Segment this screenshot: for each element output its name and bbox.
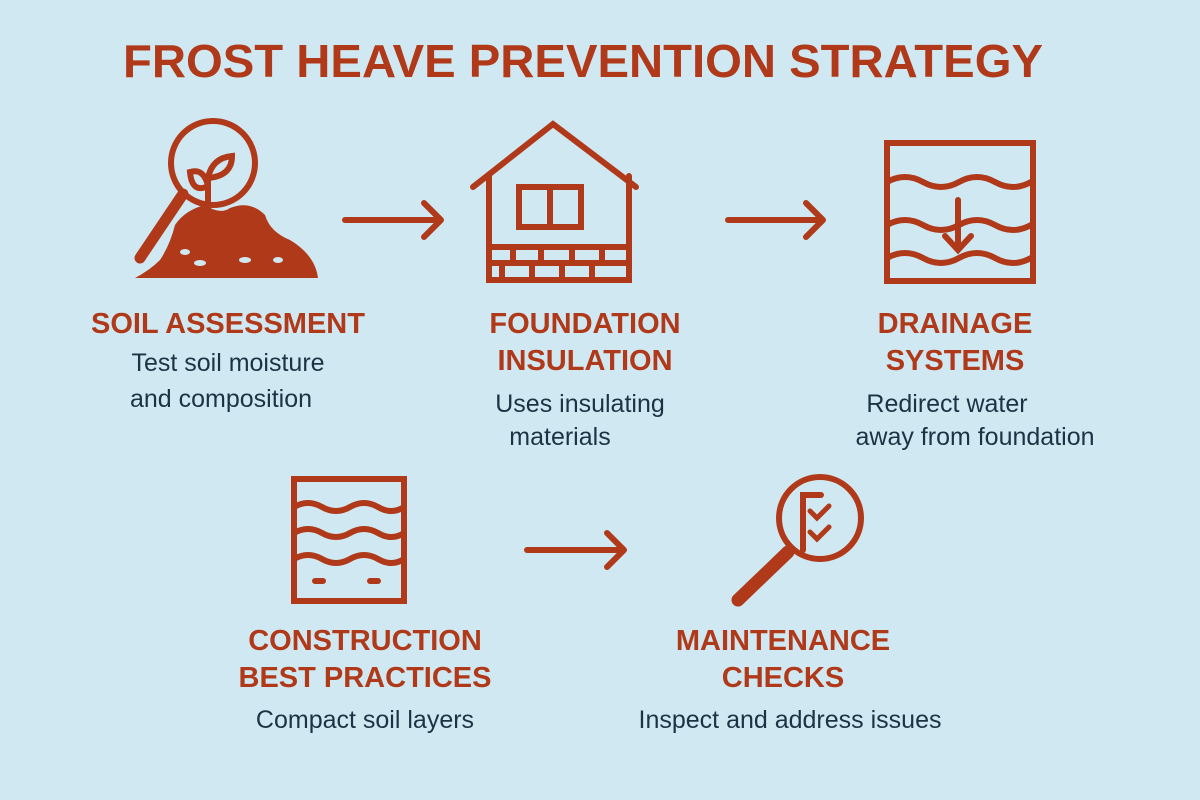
heading: soil assessment: SOIL ASSESSMENT bbox=[91, 308, 365, 340]
text: soil desc: Test soil moisture bbox=[131, 349, 325, 377]
heading: drainage: SYSTEMS bbox=[886, 345, 1024, 377]
icon: construction layers bbox=[294, 479, 404, 601]
text: drainage desc: away from foundation bbox=[855, 423, 1095, 451]
heading: foundation: INSULATION bbox=[497, 345, 673, 377]
heading: construction: BEST PRACTICES bbox=[239, 662, 491, 694]
title: FROST HEAVE PREVENTION STRATEGY bbox=[123, 35, 1043, 87]
arrow 3 bbox=[527, 533, 624, 567]
icon: soil assessment bbox=[135, 121, 318, 278]
heading: construction: CONSTRUCTION bbox=[248, 625, 482, 657]
heading: maintenance: MAINTENANCE bbox=[676, 625, 890, 657]
icon: house bbox=[473, 124, 636, 280]
text: maintenance desc: Inspect and address issues bbox=[639, 706, 941, 734]
icon: maintenance magnifier bbox=[738, 477, 861, 600]
text: soil desc: and composition bbox=[130, 385, 312, 413]
heading: foundation: FOUNDATION bbox=[489, 308, 681, 340]
text: foundation desc: materials bbox=[509, 423, 611, 451]
arrow 1 bbox=[345, 203, 441, 237]
heading: maintenance: CHECKS bbox=[722, 662, 844, 694]
text: construction desc: Compact soil layers bbox=[256, 706, 474, 734]
icon: drainage bbox=[887, 143, 1033, 281]
text: foundation desc: Uses insulating bbox=[495, 390, 665, 418]
text: drainage desc: Redirect water bbox=[866, 390, 1028, 418]
heading: drainage: DRAINAGE bbox=[878, 308, 1032, 340]
arrow 2 bbox=[728, 203, 823, 237]
